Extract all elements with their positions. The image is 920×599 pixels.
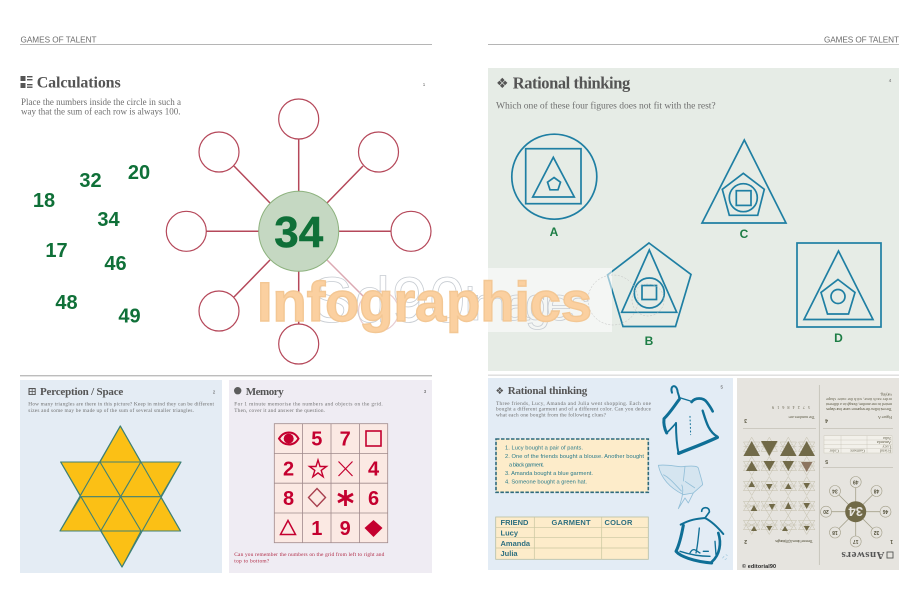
answer section numbers: 4 xyxy=(825,417,828,423)
answer 4 text xyxy=(825,392,892,420)
instructions text: Place the numbers inside the circle in such a xyxy=(21,97,181,107)
instructions: Then, cover it and answer the question. xyxy=(234,408,325,414)
answer 5 mini table: Julia xyxy=(883,436,891,441)
answer 1 spoke: 32 xyxy=(874,529,879,535)
icon: square xyxy=(366,431,381,446)
memory grid: 6 xyxy=(368,488,379,510)
number list: 17 xyxy=(45,240,68,262)
answer 3 text xyxy=(772,405,815,420)
puzzle text: Three friends, Lucy, Amanda and Julia went shopping. Each one xyxy=(496,400,652,407)
watermark outline text: Sd90 xyxy=(310,264,465,336)
clues box: 3. Amanda bought a blue garment. xyxy=(505,471,593,477)
number list: 32 xyxy=(79,170,102,192)
puzzle text: what each one bought from the following clues? xyxy=(496,411,607,418)
icon: hollow diamond xyxy=(308,488,326,506)
memory grid: 9 xyxy=(340,518,351,540)
panel: calculations xyxy=(20,75,431,364)
panel: rational thinking shopping xyxy=(488,378,733,570)
answer table: Lucy xyxy=(500,528,519,538)
answer table: FRIEND xyxy=(500,518,529,527)
icon: cross xyxy=(338,462,352,476)
watermark outline text xyxy=(310,264,590,336)
label B: B xyxy=(645,334,654,348)
instructions text: way that the sum of each row is always 100. xyxy=(21,107,180,117)
answer table xyxy=(496,517,648,559)
divider rules xyxy=(20,374,899,376)
answer table: Julia xyxy=(500,549,518,558)
clues box: 2. One of the friends bought a blouse. Another bought xyxy=(505,454,644,460)
question: top to bottom? xyxy=(234,558,270,564)
watermark white band xyxy=(488,268,612,332)
icon: diamond cluster: ❖ xyxy=(496,76,509,92)
answer 3 text: The numbers are: xyxy=(788,415,815,420)
answer 5 mini table xyxy=(824,436,892,454)
watermark dotted circles xyxy=(588,275,664,325)
page number 3: 3 xyxy=(424,389,427,394)
memory grid: 4 xyxy=(368,458,380,480)
page number 1: 1 xyxy=(423,82,426,87)
clues box: 4. Someone bought a green hat. xyxy=(505,479,587,485)
answer section numbers: 3 xyxy=(744,417,747,423)
number list: 20 xyxy=(128,162,150,184)
question: Can you remember the numbers on the grid from left to right and xyxy=(234,551,385,558)
icon: calculation signs xyxy=(20,76,32,88)
instructions text xyxy=(21,97,181,117)
icon: triangle xyxy=(280,520,296,534)
heading: calculations: Calculations xyxy=(37,75,121,92)
question xyxy=(234,551,385,564)
answer 2 caption: There are 5 times 4 (20) triangles xyxy=(775,539,813,544)
answer 1 spoke: 48 xyxy=(874,488,879,494)
page number 5: 5 xyxy=(720,384,723,390)
heading: answers: Answers xyxy=(841,549,884,561)
figure A xyxy=(512,134,597,219)
instructions: For 1 minute memorise the numbers and objects on the grid. xyxy=(234,402,383,408)
copyright credit: © editorial90 xyxy=(742,563,776,570)
memory grid xyxy=(274,424,388,543)
puzzle text: bought a different garment and of a different color. Can you deduce xyxy=(496,406,652,413)
label A: A xyxy=(550,225,559,239)
panel: memory xyxy=(229,380,432,573)
watermark outline text: images xyxy=(465,278,590,330)
icon: eye xyxy=(279,433,298,445)
instructions xyxy=(28,400,215,414)
watermark xyxy=(257,264,664,336)
answer 1 spoke: 46 xyxy=(883,508,888,514)
answer 1 spoke xyxy=(820,476,891,547)
answers dividers xyxy=(743,385,893,565)
number list: 18 xyxy=(33,190,55,212)
clues box xyxy=(496,439,648,492)
illustration: bonnet xyxy=(658,465,703,509)
header: right page: GAMES OF TALENT xyxy=(824,36,899,44)
illustration: hanger coat xyxy=(676,508,727,563)
memory grid: 1 xyxy=(311,518,322,540)
answer 1 spoke: 20 xyxy=(823,508,829,514)
watermark main word: Infographics xyxy=(257,270,592,333)
panel: rational thinking top xyxy=(488,68,899,371)
heading: memory: Memory xyxy=(246,386,284,398)
page number 4: 4 xyxy=(889,78,892,83)
panel: perception space xyxy=(20,380,222,573)
instructions xyxy=(234,402,383,414)
answer 1 spoke: 17 xyxy=(853,538,858,544)
star of triangles xyxy=(60,426,181,567)
icon: asterisk xyxy=(338,490,353,506)
label C: C xyxy=(740,227,749,241)
answer 3 text: 5 7 2 4 8 6 1 9 xyxy=(772,405,810,410)
icon: diamond cluster small: ❖ xyxy=(496,386,504,397)
illustration: blouse xyxy=(664,386,717,454)
page number 2: 2 xyxy=(213,390,216,394)
clues box: a black garment. xyxy=(509,462,544,468)
answer 5 mini table: Lucy xyxy=(881,444,891,450)
answer 4 text: varying. xyxy=(880,392,892,398)
header: left page: GAMES OF TALENT xyxy=(20,36,96,44)
memory grid: 5 xyxy=(311,428,322,450)
question text: Which one of these four figures does not fit with the rest? xyxy=(496,100,716,111)
answer 4 text: nested in one another, though in a different xyxy=(825,401,892,407)
answer 4 text: The rest follow the sequence: same four shapes xyxy=(826,407,892,412)
number list: 48 xyxy=(55,292,78,314)
spoke diagram xyxy=(166,99,431,364)
figure D xyxy=(797,243,881,327)
answer 1 spoke: 18 xyxy=(832,529,838,535)
instructions: How many triangles are there in this picture? Keep in mind they can be different xyxy=(28,400,215,408)
icon: solid diamond xyxy=(364,520,382,537)
memory grid: 7 xyxy=(340,428,351,450)
answer 1 spoke: 34 xyxy=(848,504,863,519)
memory grid: 8 xyxy=(283,488,294,510)
answer table: Amanda xyxy=(500,539,531,548)
answer 1 spoke: 34 xyxy=(832,488,838,494)
label D: D xyxy=(834,331,843,345)
answer 2 star grid xyxy=(743,437,815,534)
icon: dot xyxy=(234,387,241,394)
number list: 46 xyxy=(104,253,127,275)
answer section numbers xyxy=(744,417,893,544)
number list: 49 xyxy=(118,306,141,328)
answer 5 mini table: Friend xyxy=(879,448,891,454)
instructions: sizes and some may be made up of the sum of several smaller triangles. xyxy=(28,407,194,414)
figure C xyxy=(702,140,786,223)
number list: 34 xyxy=(97,209,120,231)
answer 4 text: Figure A xyxy=(878,415,892,420)
panel: answers upside down xyxy=(737,378,899,570)
answer section numbers: 2 xyxy=(744,538,747,544)
heading: perception: Perception / Space xyxy=(40,386,123,398)
answer table: GARMENT xyxy=(552,518,591,527)
puzzle text xyxy=(496,400,652,418)
number list xyxy=(33,162,150,328)
figure B xyxy=(608,243,691,326)
answer 5 mini table: Garment xyxy=(850,448,865,454)
answer 5 mini table: Amanda xyxy=(877,440,891,445)
answer section numbers: 1 xyxy=(890,538,893,544)
answer 1 spoke: 49 xyxy=(853,478,858,484)
answer table: COLOR xyxy=(604,518,633,527)
heading: rational thinking: Rational thinking xyxy=(513,73,631,92)
icon: star xyxy=(310,460,326,477)
answer 4 text: order each time, with the outer shape xyxy=(826,396,892,402)
spoke diagram: 34 xyxy=(274,208,324,257)
answer 5 mini table: Color xyxy=(829,448,839,454)
memory grid: 2 xyxy=(283,458,294,480)
icon: die xyxy=(28,388,36,395)
answer section numbers: 5 xyxy=(825,458,828,464)
icon: answers box xyxy=(887,552,893,558)
heading: rational thinking small: Rational thinking xyxy=(508,385,588,397)
clues box: 1. Lucy bought a pair of pants. xyxy=(505,445,583,451)
